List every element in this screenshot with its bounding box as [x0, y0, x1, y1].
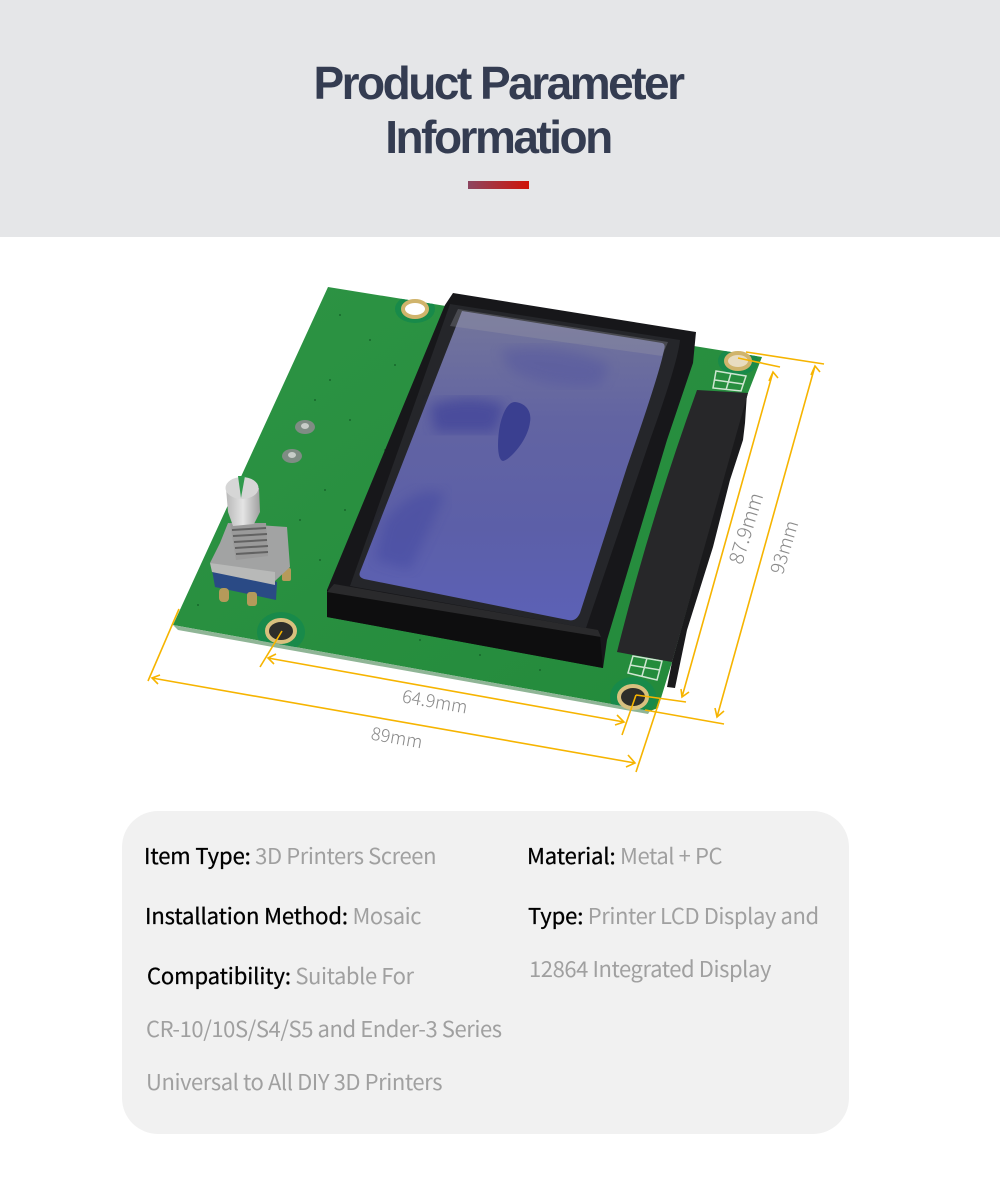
- spec: compatibility line 2: CR-10/10S/S4/S5 and Ender-3 Series: [146, 1012, 502, 1044]
- dimension: 87.9mm: [636, 358, 780, 702]
- label: 93mm: 93mm: [763, 517, 804, 577]
- label: 64.9mm: 64.9mm: [400, 682, 470, 720]
- dimension lines: [148, 352, 824, 772]
- circuit board: [173, 287, 762, 711]
- label: 89mm: 89mm: [369, 720, 425, 754]
- board pads: [257, 295, 758, 717]
- spec: compatibility: Compatibility: Suitable For: [147, 959, 414, 991]
- dimension: 64.9mm: [260, 631, 636, 735]
- LCD shading: [430, 398, 505, 432]
- spec: material: Material: Metal + PC: [527, 839, 722, 871]
- LCD reflection spot: [498, 402, 530, 461]
- title: Information: [385, 111, 611, 163]
- encoder pins: [219, 568, 291, 606]
- product diagram: [147, 287, 824, 772]
- spec: type: Type: Printer LCD Display and: [528, 899, 819, 931]
- mounting holes: [267, 301, 750, 708]
- panel: specifications: [122, 811, 849, 1134]
- title: [313, 57, 684, 163]
- board specks: [197, 314, 541, 671]
- LCD bezel glass: [350, 304, 680, 628]
- black connector side pieces: [667, 393, 747, 688]
- title: Product Parameter: [313, 57, 683, 109]
- encoder knob: [226, 488, 260, 526]
- encoder housing: [210, 523, 290, 581]
- header band: [0, 0, 1000, 237]
- LCD screen: [360, 311, 665, 620]
- LCD board: [173, 287, 762, 717]
- spec: type line 2: 12864 Integrated Display: [529, 952, 771, 984]
- encoder base: [212, 570, 277, 600]
- spec: installation method: Installation Method: Mosaic: [145, 899, 421, 931]
- spec: compatibility line 3: Universal to All DIY 3D Printers: [146, 1065, 442, 1097]
- LCD bezel top highlight: [450, 309, 668, 356]
- LCD frame top and sides: [327, 293, 696, 668]
- dimension: 93mm: [645, 352, 824, 724]
- spec: item type: Item Type: 3D Printers Screen: [144, 839, 436, 871]
- rotary encoder: [210, 476, 291, 606]
- dimension: 89mm: [148, 609, 660, 772]
- LCD frame front edge: [327, 590, 603, 668]
- encoder shaft: [230, 523, 268, 560]
- label: 87.9mm: 87.9mm: [720, 489, 769, 567]
- title accent bar: [468, 181, 529, 189]
- black connector: [617, 390, 748, 662]
- silkscreen markings: [628, 371, 746, 680]
- solder joints: [282, 420, 315, 463]
